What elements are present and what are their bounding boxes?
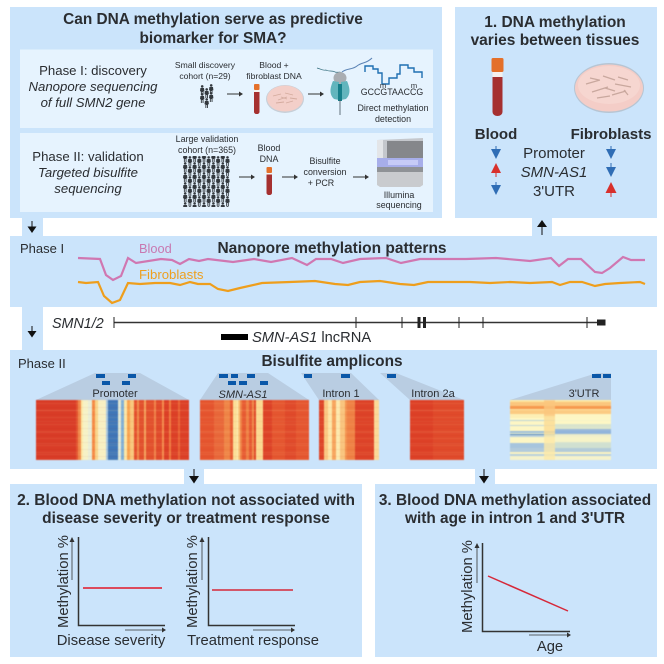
heading: finding 2: disease severity or treatment response (42, 510, 330, 527)
text: Illumina sequencing: sequencing (376, 200, 422, 210)
text: sequence read: GCCGTAACCG (361, 87, 423, 97)
chart line: fibroblast methylation (78, 281, 645, 303)
label: SMN1/2: SMN1/2 (52, 316, 104, 332)
text: phase II description: Targeted bisulfite (38, 165, 138, 180)
text: genomic regions (521, 145, 587, 200)
text: blood DNA: Blood (258, 143, 280, 153)
text: large validation cohort: cohort (n=365) (178, 145, 236, 155)
axis arrow: right (529, 632, 571, 638)
callout: 3'UTR zoom: 3'UTR (569, 388, 599, 400)
arrow (239, 174, 255, 180)
axis arrow: right (125, 628, 166, 632)
heading: nanopore patterns: Nanopore methylation patterns (217, 240, 447, 257)
label: fibroblasts trace: Fibroblasts (139, 267, 204, 282)
text: genomic regions: Promoter (523, 145, 585, 162)
text: phase I description: Nanopore sequencing (28, 79, 158, 94)
text: direct methylation detection: detection (375, 114, 411, 124)
text: bisulfite conversion: + PCR (308, 178, 334, 188)
text: genomic regions: SMN-AS1 (521, 164, 587, 181)
trend line (212, 589, 293, 591)
axes (482, 543, 570, 632)
text: genomic regions: 3'UTR (533, 183, 575, 200)
heading: finding 1: 1. DNA methylation (484, 14, 626, 31)
callout: intron 1 zoom (301, 373, 379, 400)
text: direct methylation detection: Direct methylation (357, 103, 429, 113)
heading: finding 3: 3. Blood DNA methylation associated (379, 492, 651, 509)
trend line (83, 587, 162, 589)
heading: finding 1: varies between tissues (471, 32, 639, 49)
icon: blood tube (254, 84, 260, 114)
text: tissue labels: Fibroblasts (571, 126, 651, 143)
axis label: methylation: Methylation % (185, 535, 201, 628)
callout: intron 2a zoom (380, 373, 464, 400)
panel: phase I discovery (20, 50, 433, 128)
text: blood and fibroblast DNA: fibroblast DNA (246, 71, 302, 81)
axis label: methylation: Methylation % (56, 535, 72, 628)
axis arrow: right (253, 628, 295, 632)
connector: arrow to panel 2 (184, 469, 204, 484)
axis label: disease severity: Disease severity (57, 633, 166, 649)
label: SMN-AS1 lncRNA: SMN-AS1 lncRNA (252, 330, 371, 346)
axis arrow: up (474, 543, 480, 583)
heatmap: 3'UTR (510, 400, 611, 460)
heatmap: SMN-AS1 (200, 400, 309, 460)
arrow (227, 92, 243, 96)
icon: small cohort people (200, 84, 213, 108)
callout: SMN-AS1 zoom (200, 373, 309, 401)
panel: Bisulfite amplicons (10, 350, 657, 469)
heading: bisulfite amplicons: Bisulfite amplicons (261, 353, 403, 370)
panel: 3. associated with age (375, 484, 657, 657)
heading: main question: Can DNA methylation serve as predictive (63, 11, 363, 28)
text: phase II description: sequencing (54, 181, 122, 196)
axis arrow: up (70, 537, 74, 580)
arrow (308, 92, 324, 96)
text: sequence read: m (411, 81, 417, 90)
icon: large cohort people (183, 156, 230, 207)
text: blood DNA: DNA (260, 154, 278, 164)
panel: phase II validation (20, 133, 433, 212)
arrow (282, 174, 298, 180)
icon: blood arrows (491, 146, 501, 195)
axis label: methylation: Methylation % (460, 540, 476, 633)
axis label: treatment response: Treatment response (187, 633, 319, 649)
panel: study design (10, 7, 442, 218)
icon: petri dish with fibroblasts (574, 63, 644, 113)
label: phase I: Phase I (20, 241, 64, 256)
callout: intron 2a zoom: Intron 2a (411, 388, 456, 400)
panel: Nanopore methylation patterns (10, 236, 657, 307)
text: phase I description: of full SMN2 gene (41, 95, 145, 110)
callout: promoter zoom (36, 373, 189, 400)
heatmap: intron 1 (319, 400, 379, 460)
text: bisulfite conversion: Bisulfite (309, 156, 341, 166)
heading: finding 3: with age in intron 1 and 3'UTR (404, 510, 625, 527)
axes (208, 537, 295, 626)
connector: arrow to panel 3 (475, 469, 495, 484)
panel: 1. methylation varies between tissues (455, 7, 657, 218)
text: small discovery cohort: Small discovery (175, 60, 235, 70)
text: bisulfite conversion: conversion (304, 167, 347, 177)
callout: promoter zoom: Promoter (92, 388, 138, 400)
chart line: blood methylation (78, 257, 645, 280)
text: sequence read (361, 81, 423, 97)
heatmap: promoter (36, 400, 189, 460)
chart: methylation vs treatment response (185, 535, 319, 649)
connector: up arrow strip to panel 1 (532, 218, 552, 236)
gene line with exons (114, 317, 606, 328)
callout: SMN-AS1 zoom: SMN-AS1 (219, 389, 267, 401)
text: large validation cohort: Large validation (176, 134, 238, 144)
icon: nanopore with DNA strand (317, 58, 372, 115)
panel: 2. not associated with severity or treatment response (10, 484, 362, 657)
heading: main question: biomarker for SMA? (139, 30, 287, 47)
axis arrow: up (200, 537, 204, 580)
callout: 3'UTR zoom (510, 373, 611, 400)
callout: intron 1 zoom: Intron 1 (322, 388, 360, 400)
lncRNA bar (221, 334, 248, 340)
axis label: age: Age (537, 639, 563, 655)
label: blood trace: Blood (139, 241, 172, 256)
text: small discovery cohort: cohort (n=29) (179, 71, 231, 81)
chart: nanopore signal trace (365, 65, 422, 84)
chart: methylation vs age (460, 540, 571, 655)
arrow (353, 174, 369, 180)
text: tissue labels: Blood (475, 126, 517, 143)
icon: blood tube (266, 167, 272, 195)
heatmap: intron 2a (410, 400, 464, 460)
icon: fibroblast arrows (606, 146, 616, 197)
label: phase II: Phase II (18, 356, 66, 371)
gene model: SMN1/2 (52, 316, 606, 346)
icon: petri dish (266, 85, 304, 113)
axes (78, 537, 165, 626)
text: blood and fibroblast DNA: Blood + (259, 60, 289, 70)
heading: finding 2: 2. Blood DNA methylation not associated with (17, 492, 355, 509)
icon: sequencer (377, 138, 423, 187)
text: phase II description: Phase II: validation (32, 149, 144, 164)
chart: methylation vs disease severity (56, 535, 166, 649)
connector: second left arrow strip (22, 307, 43, 350)
trend line (488, 576, 568, 611)
text: Illumina sequencing: Illumina (384, 190, 414, 200)
text: sequence read: m (380, 81, 386, 90)
icon: blood tube (492, 58, 504, 116)
text: phase I description: Phase I: discovery (39, 63, 147, 78)
connector: top left arrow strip (22, 218, 43, 236)
text: tissue labels (475, 126, 651, 143)
